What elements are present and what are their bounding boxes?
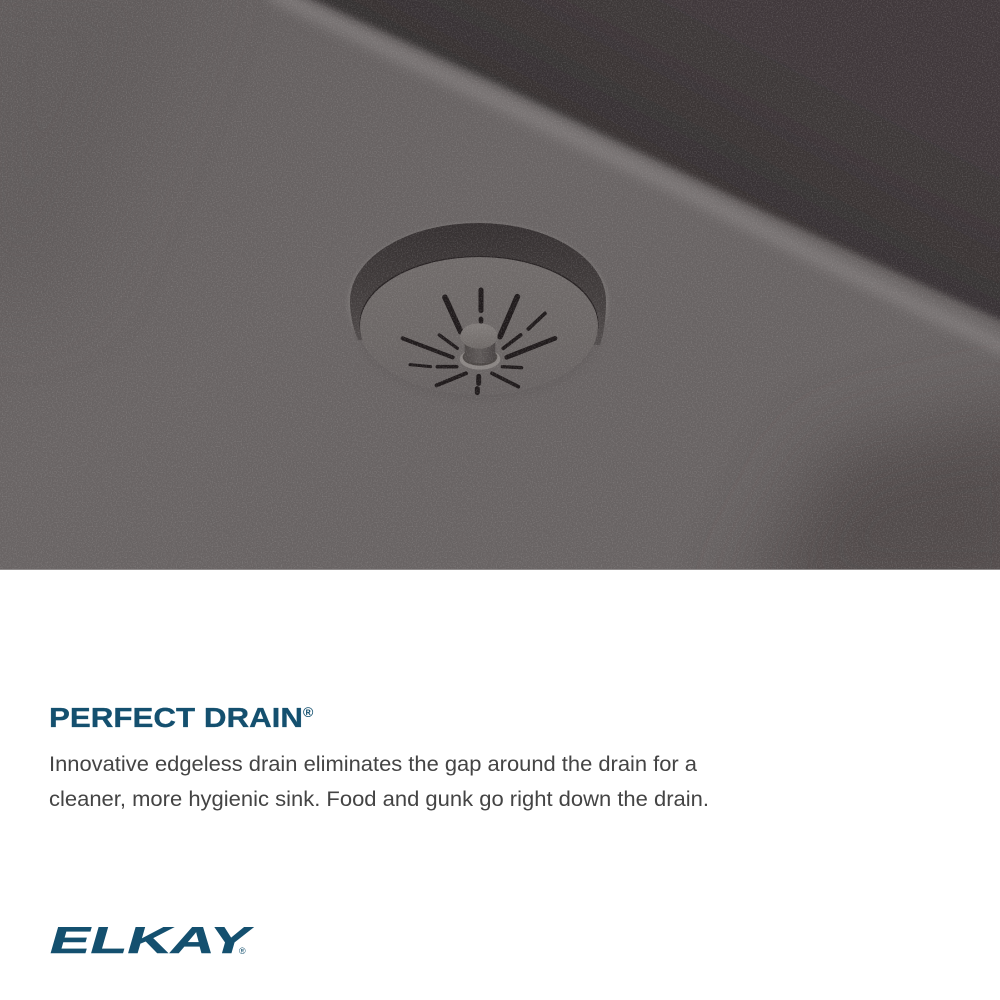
logo: Elkay: ELKAY [44, 920, 257, 962]
drain strainer plate [360, 257, 598, 395]
drain strainer shadow edge [360, 256, 598, 334]
drain opening [350, 223, 606, 345]
heading: PERFECT DRAIN [49, 702, 303, 733]
body text: cleaner, more hygienic sink. Food and gunk go right down the drain. [49, 787, 709, 811]
logo: Elkay: ® [239, 946, 246, 956]
dark basin wall [297, 0, 1000, 324]
strainer knob [460, 323, 500, 370]
highlight along basin edge [270, 0, 1000, 350]
sink floor surface [0, 0, 1000, 570]
drain opening rim glow [348, 225, 608, 324]
top left floor shading [0, 0, 200, 300]
body text: Innovative edgeless drain eliminates the gap around the drain for a [49, 752, 697, 776]
surface grain [0, 0, 1000, 570]
body text [49, 752, 709, 811]
lower right floor shading [753, 396, 1000, 569]
logo: Elkay [44, 920, 257, 962]
strainer slots [403, 290, 555, 393]
photo bottom edge [0, 569, 1000, 570]
photo: sink basin with drain [0, 0, 1000, 620]
drain strainer soft surround [358, 261, 602, 401]
heading: ® [303, 704, 314, 720]
